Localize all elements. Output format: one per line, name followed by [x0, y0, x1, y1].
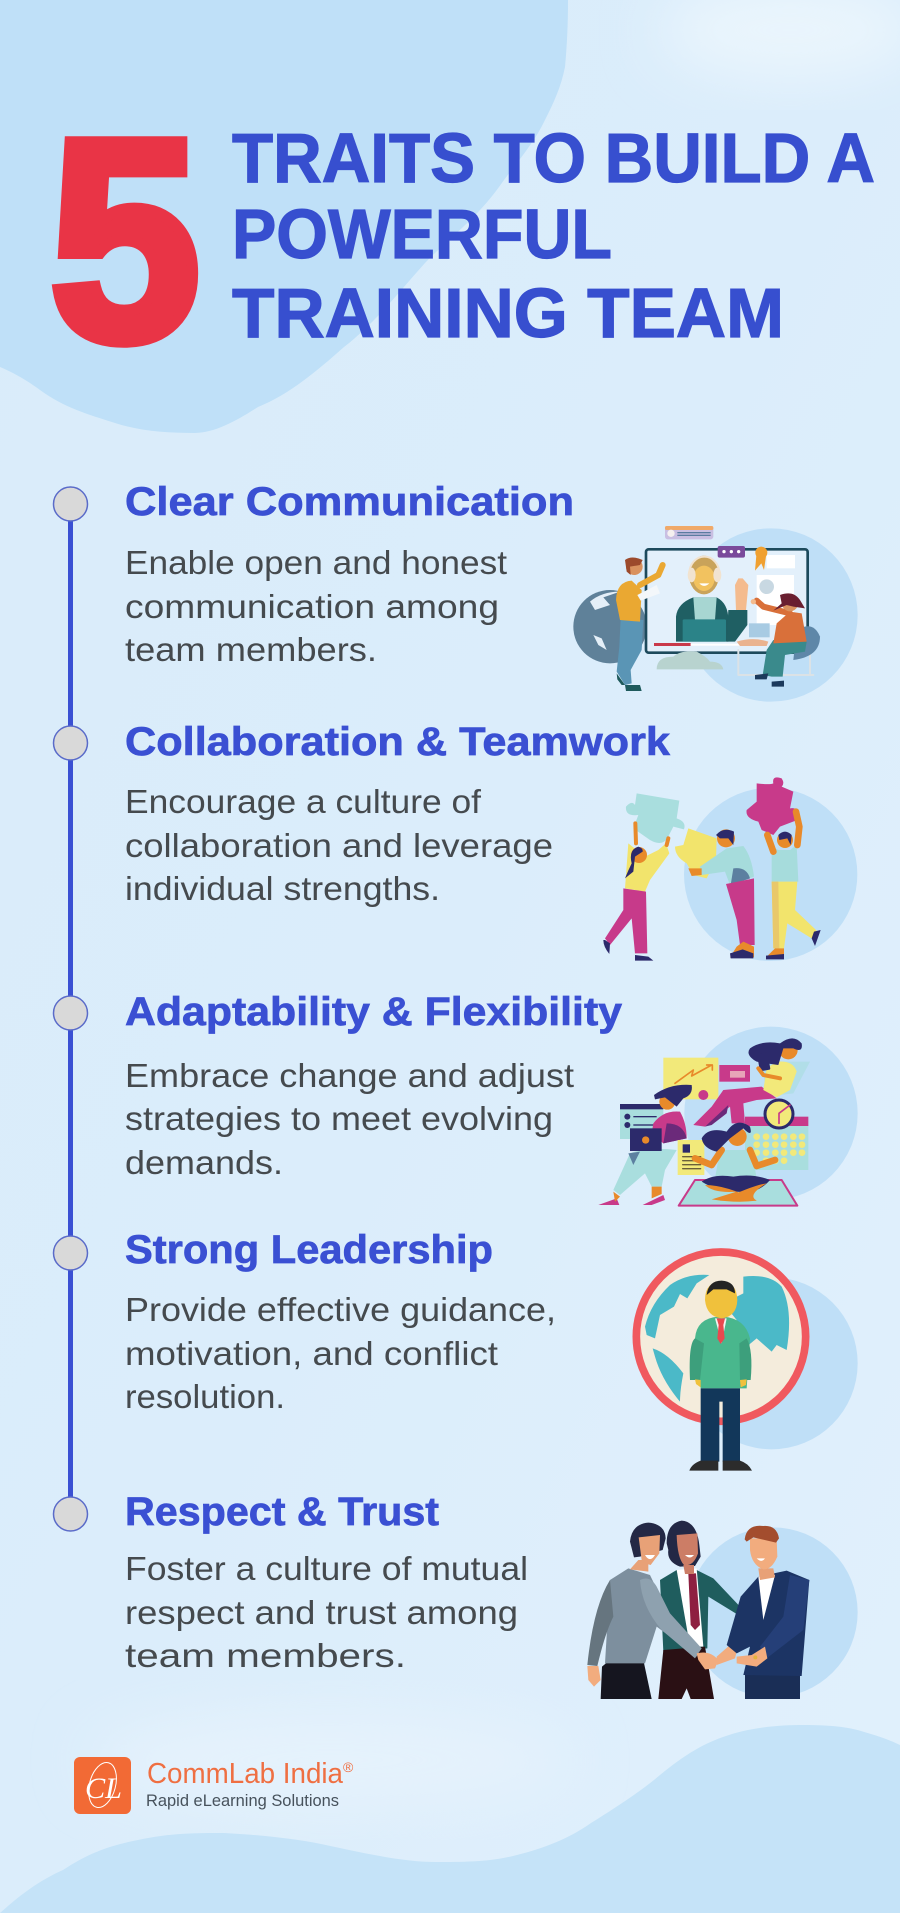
- title: [232, 119, 875, 352]
- body: Strong Leadership: [125, 1292, 556, 1416]
- title: POWERFUL: [232, 195, 612, 273]
- heading: Clear Communication: Clear Communication: [125, 480, 574, 524]
- heading: Respect & Trust: Respect & Trust: [125, 1490, 439, 1534]
- timeline node 2: [54, 726, 88, 760]
- background blob top-left: [0, 0, 568, 433]
- illustration: handshake trust: [587, 1521, 858, 1699]
- big number 5: 5: [50, 80, 200, 400]
- illustration: video call communication: [573, 526, 858, 702]
- trait 2 text: [125, 720, 671, 908]
- background wave bottom: [0, 1725, 900, 1913]
- logo tagline: Rapid eLearning Solutions: [146, 1791, 339, 1810]
- body: Respect & Trust: team members.: [125, 1638, 406, 1675]
- timeline node 4: [54, 1236, 88, 1270]
- body: Collaboration & Teamwork: [125, 784, 553, 908]
- body: Strong Leadership: motivation, and conflict: [125, 1336, 499, 1373]
- body: Respect & Trust: Foster a culture of mutual: [125, 1551, 528, 1588]
- illustration: puzzle teamwork: [603, 777, 857, 961]
- trait 3 text: [125, 990, 623, 1182]
- body: Clear Communication: team members.: [125, 632, 377, 669]
- heading: Strong Leadership: Strong Leadership: [125, 1228, 493, 1272]
- heading: Collaboration & Teamwork: Collaboration & Teamwork: [125, 720, 671, 764]
- body: Respect & Trust: respect and trust among: [125, 1595, 518, 1632]
- body: Adaptability & Flexibility: [125, 1058, 575, 1182]
- illustration: leader and globe: [636, 1252, 858, 1471]
- body: Clear Communication: Enable open and honest: [125, 545, 508, 582]
- trait 5 text: [125, 1490, 528, 1675]
- body: Strong Leadership: resolution.: [125, 1379, 285, 1416]
- logo: CommLab India: [74, 1757, 354, 1814]
- illustration: adaptable team: [598, 1027, 858, 1206]
- body: Clear Communication: communication among: [125, 589, 499, 626]
- trait 1 text: [125, 480, 574, 669]
- body: Collaboration & Teamwork: Encourage a culture of: [125, 784, 482, 821]
- body: Adaptability & Flexibility: Embrace change and adjust: [125, 1058, 575, 1095]
- timeline node 1: [54, 487, 88, 521]
- timeline: [54, 487, 88, 1531]
- logo icon: CL: [85, 1772, 122, 1805]
- title: TRAITS TO BUILD A: [232, 119, 875, 197]
- timeline node 3: [54, 996, 88, 1030]
- timeline node 5: [54, 1497, 88, 1531]
- body: Adaptability & Flexibility: demands.: [125, 1145, 283, 1182]
- body: Collaboration & Teamwork: individual strengths.: [125, 871, 440, 908]
- body: Strong Leadership: Provide effective guidance,: [125, 1292, 556, 1329]
- body: Adaptability & Flexibility: strategies to meet evolving: [125, 1101, 553, 1138]
- logo icon: [74, 1757, 131, 1814]
- logo name: CommLab India: [147, 1758, 344, 1790]
- heading: Adaptability & Flexibility: Adaptability & Flexibility: [125, 990, 623, 1034]
- body: Collaboration & Teamwork: collaboration and leverage: [125, 828, 553, 865]
- body: Clear Communication: [125, 545, 508, 669]
- trait 4 text: [125, 1228, 556, 1416]
- body: Respect & Trust: [125, 1551, 528, 1675]
- registered mark: ®: [343, 1759, 354, 1775]
- title: TRAINING TEAM: [232, 274, 784, 352]
